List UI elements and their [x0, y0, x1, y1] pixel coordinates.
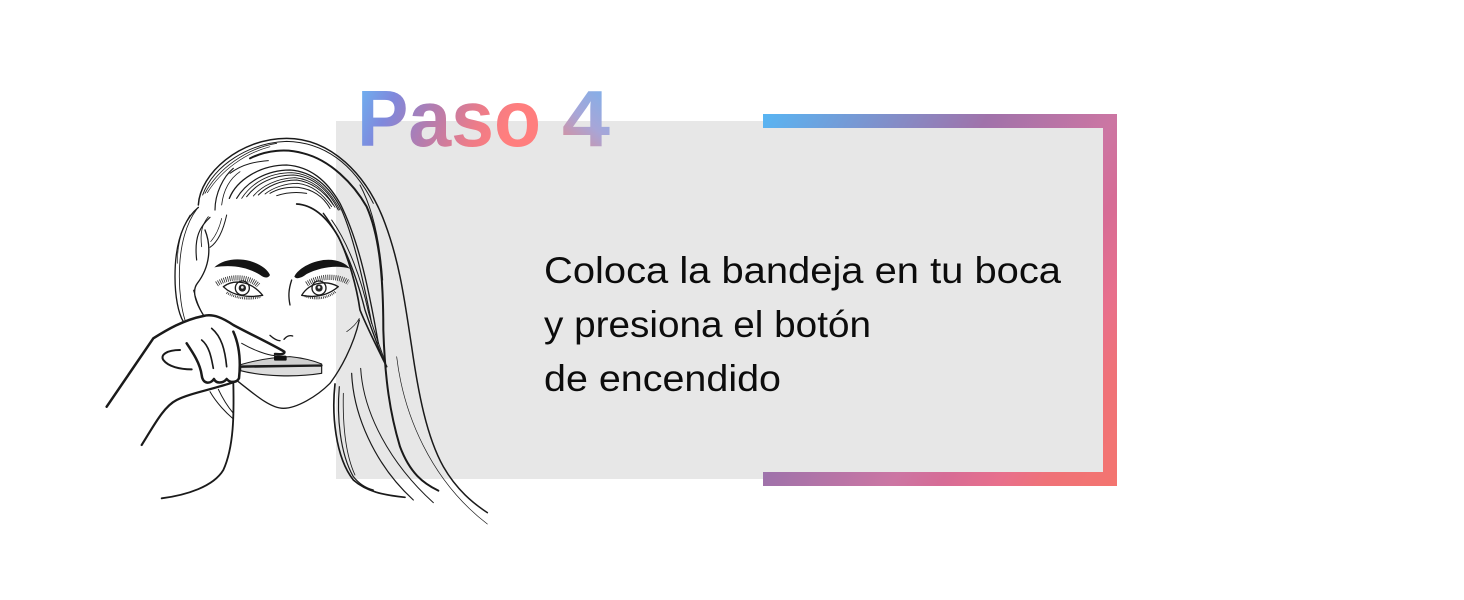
instruction text: [544, 250, 1061, 399]
eyebrows: [214, 259, 350, 278]
eye: left: [217, 278, 263, 298]
heading: Paso 4: 4: [562, 74, 611, 163]
instruction text: de encendido: [544, 358, 781, 399]
eye: right: [302, 277, 349, 298]
hair strands: [175, 138, 487, 524]
nose: [270, 280, 293, 341]
gradient corner frame: [763, 114, 1117, 486]
panel: grey background: [336, 121, 1103, 479]
heading: Paso 4: Paso: [357, 74, 541, 163]
instruction text: y presiona el botón: [544, 304, 871, 345]
jaw and neck: [162, 318, 359, 498]
hand: [107, 315, 284, 445]
instruction text: Coloca la bandeja en tu boca: [544, 250, 1061, 291]
whitening tray: [241, 356, 322, 376]
illustration: woman pressing the tray button: [107, 138, 487, 524]
